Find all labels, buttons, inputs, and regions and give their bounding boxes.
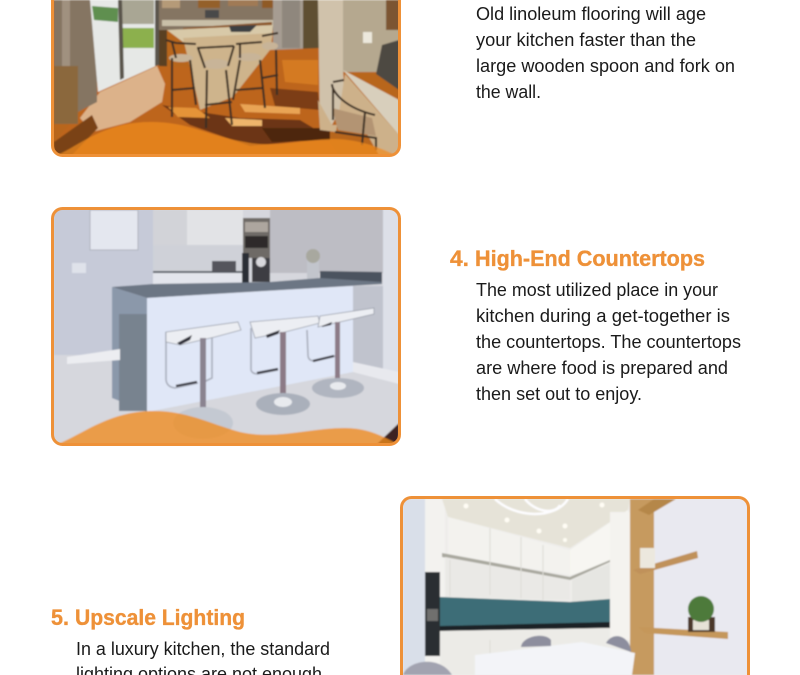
section 4 heading and text: The most utilized place in your xyxy=(476,280,718,300)
section 3 body text: Old linoleum flooring will age xyxy=(476,4,706,24)
section 4 heading and text: are where food is prepared and xyxy=(476,358,728,378)
photo: kitchen with hardwood floor xyxy=(52,0,402,157)
section 5 heading and text: In a luxury kitchen, the standard xyxy=(76,639,330,659)
section 5 heading and text: 5. xyxy=(51,605,69,630)
photo: white kitchen with upscale lighting xyxy=(400,496,750,675)
section 4 heading and text: then set out to enjoy. xyxy=(476,384,642,404)
section 4 heading and text xyxy=(450,246,741,404)
section 4 heading and text: the countertops. The countertops xyxy=(476,332,741,352)
section 3 body text: your kitchen faster than the xyxy=(476,30,696,50)
section 5 heading and text: Upscale Lighting xyxy=(75,605,245,630)
section 4 heading and text: High-End Countertops xyxy=(475,246,705,271)
section 3 body text: large wooden spoon and fork on xyxy=(476,56,735,76)
section 4 heading and text: 4. xyxy=(450,246,469,271)
section 3 body text xyxy=(476,4,735,102)
section 4 heading and text: kitchen during a get-together is xyxy=(476,306,730,326)
section 3 body text: the wall. xyxy=(476,82,541,102)
photo: grey kitchen with countertop and stools xyxy=(52,207,402,447)
section 5 heading and text xyxy=(51,605,330,675)
